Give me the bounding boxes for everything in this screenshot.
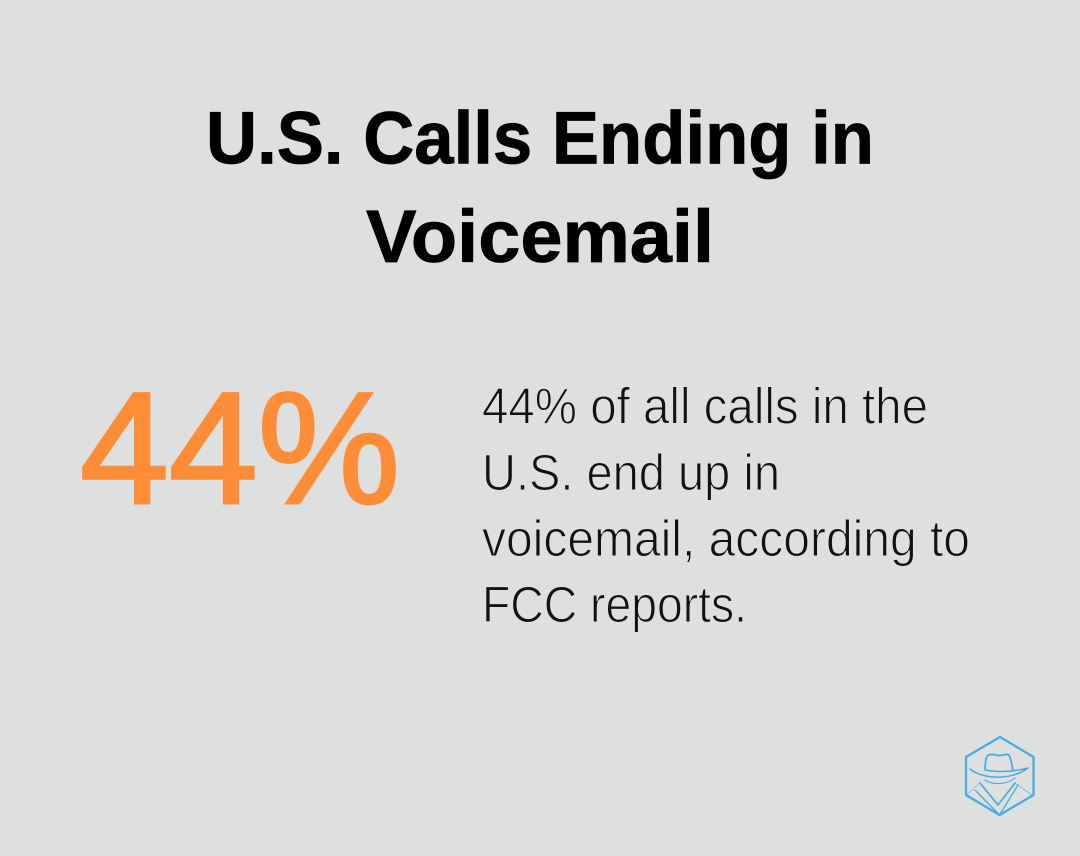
description text: 44% of all calls in the xyxy=(482,378,928,434)
description text: voicemail, according to xyxy=(482,510,970,567)
description text xyxy=(482,378,970,633)
description text: U.S. end up in xyxy=(482,444,780,501)
title: U.S. Calls Ending in xyxy=(206,96,874,180)
description text: FCC reports. xyxy=(482,576,747,633)
big statistic: 44%: 44% xyxy=(80,359,400,537)
title xyxy=(206,96,874,278)
icon: hexagon logo with hat and coat xyxy=(966,737,1034,815)
title: Voicemail xyxy=(366,195,714,278)
